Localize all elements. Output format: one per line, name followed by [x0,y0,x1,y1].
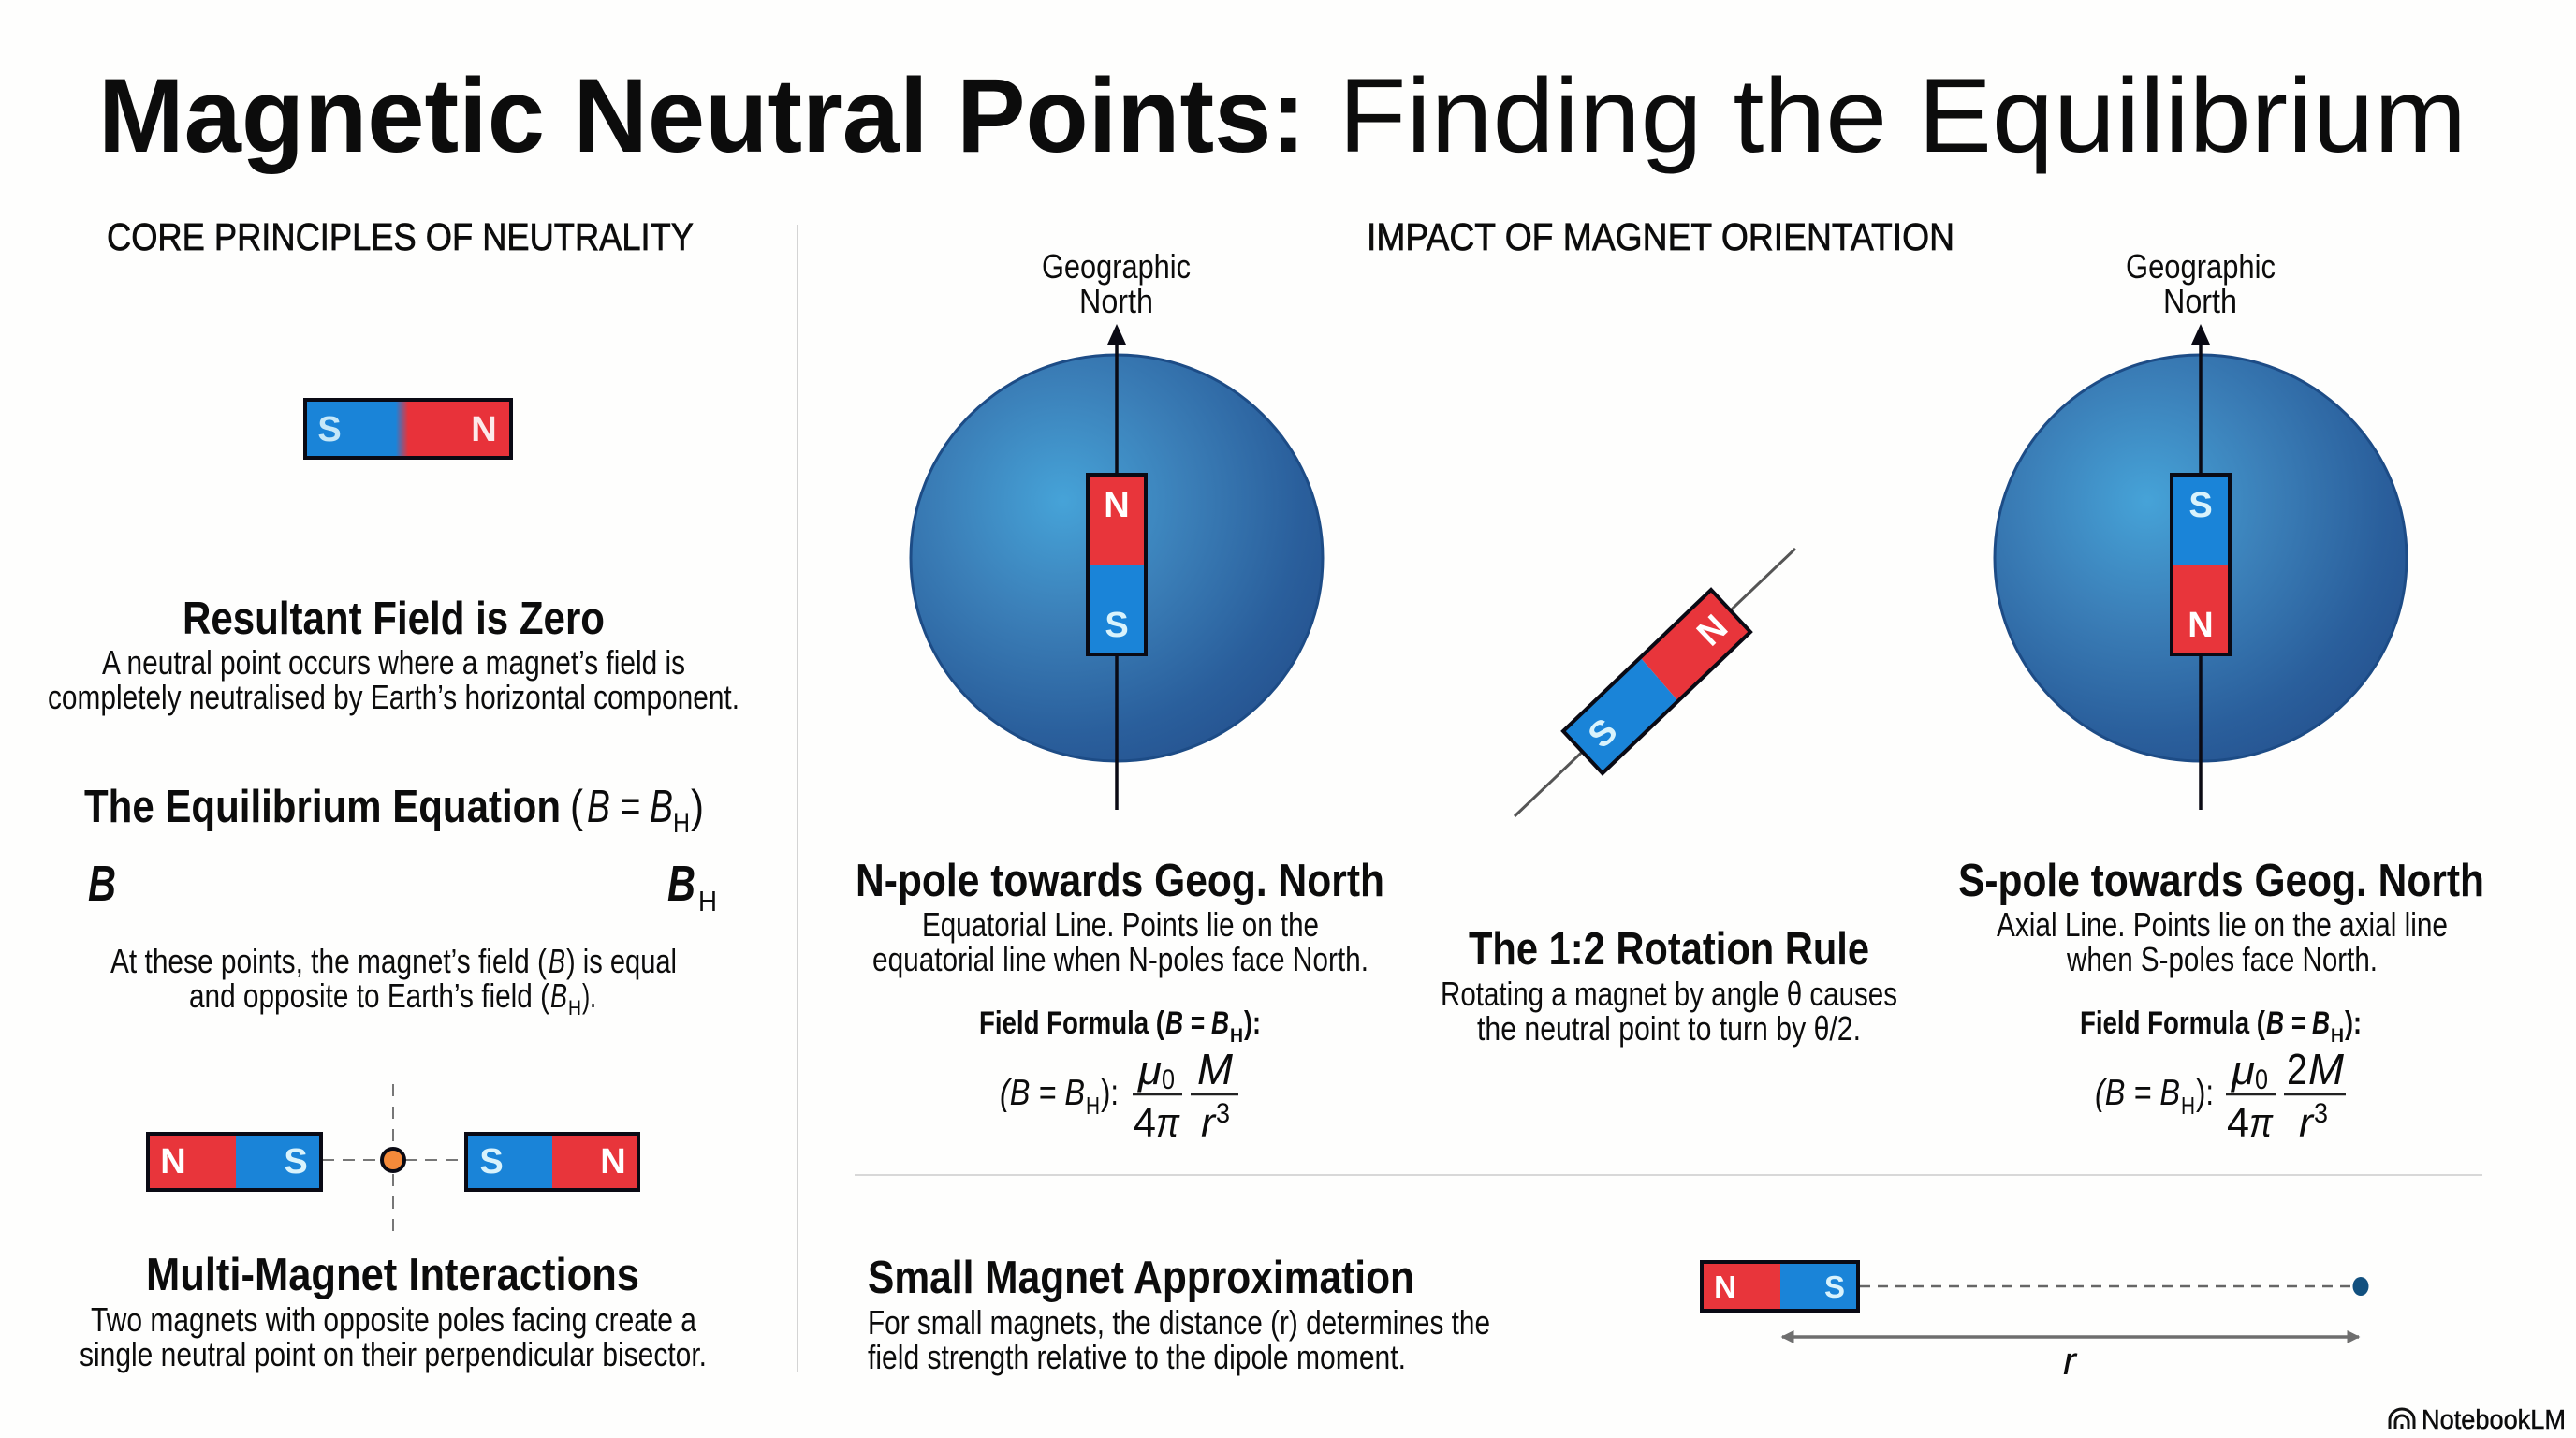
formula: mu0/4pi M/r3: 0 [1162,1064,1175,1095]
text block: rotation rule: The 1:2 Rotation Rule [1469,924,1869,975]
sub-panel: small magnet approximation [868,1253,2368,1383]
formula: mu0/4pi M/r3: ): [1101,1073,1119,1113]
formula: mu0/4pi M/r3: r [1201,1100,1217,1146]
diagram: distance r [1702,1262,2368,1383]
label: B_H [667,856,717,917]
magnet: N-S left: S [284,1142,308,1181]
arrow: distance r [1782,1335,2359,1339]
label: geographic north: North [2163,282,2237,320]
diagram: globe with S-up magnet: N [2188,606,2214,645]
neutral point [382,1149,404,1171]
label: geographic north [1042,247,1191,320]
sub-panel: S-pole towards geographic north [1958,247,2484,1146]
formula: mu0/4pi 2M/r3: ): [2196,1073,2214,1113]
panel: core principles of neutrality [48,215,739,1373]
formula: mu0/4pi 2M/r3: H [2181,1092,2195,1120]
text block: multi-magnet interactions: single neutral point on their perpendicular bisector. [80,1335,707,1373]
formula: mu0/4pi M/r3: 4 [1134,1100,1156,1146]
label: geographic north: Geographic [1042,247,1191,286]
text block: small magnet approximation [868,1253,1490,1376]
sub-panel: 1:2 rotation rule [1441,549,1897,1048]
diagram: globe with N-up magnet [911,324,1323,810]
title [98,57,2466,174]
text block: N-pole heading and description [856,856,1384,978]
text block: N-pole heading and description: equatorial line when N-poles face North. [872,940,1368,978]
text block: resultant field is zero: Resultant Field is Zero [183,594,605,644]
text block: multi-magnet interactions: Two magnets with opposite poles facing create a [91,1300,697,1339]
panel: impact of magnet orientation [855,215,2484,1383]
diagram: two magnets with neutral point [148,1084,638,1236]
label: B_H: B [667,856,695,912]
formula: mu0/4pi 2M/r3: μ [2231,1048,2255,1093]
label: field formula: Field Formula ( [2080,1005,2266,1041]
text block: equilibrium explanation: At these points, the magnet’s field ( [110,942,547,980]
text block: small magnet approximation: For small magnets, the distance (r) determines the [868,1303,1490,1342]
label: geographic north [2126,247,2276,320]
formula: mu0/4pi 2M/r3: 0 [2255,1064,2268,1095]
label: field formula [2080,1005,2362,1047]
magnet: N-S left: N [160,1142,186,1181]
text block: rotation rule: Rotating a magnet by angle θ causes [1441,975,1897,1013]
label: field formula: H [2331,1025,2344,1047]
text block: equilibrium explanation: ). [582,976,596,1015]
text block: multi-magnet interactions [80,1250,707,1373]
icon: bar magnet S-N [305,400,511,458]
diagram: globe with N-up magnet: S [1105,606,1129,645]
watermark: NotebookLM: NotebookLM [2422,1405,2566,1435]
icon: bar magnet S-N: S [317,410,342,449]
title: Magnetic Neutral Points: [98,57,1306,174]
heading: the equilibrium equation: B = B [587,782,673,832]
diagram: globe with S-up magnet [1995,324,2407,810]
formula: mu0/4pi M/r3: M [1197,1045,1234,1093]
heading: the equilibrium equation: ) [691,782,704,832]
text block: equilibrium explanation: and opposite to Earth’s field ( [189,976,549,1015]
formula: mu0/4pi 2M/r3: 4 [2227,1100,2249,1146]
label: geographic north: Geographic [2126,247,2276,286]
text block: resultant field is zero: A neutral point occurs where a magnet’s field is [102,643,685,682]
text block: small magnet approximation: field strength relative to the dipole moment. [868,1338,1406,1376]
magnet: N-S small: N [1714,1269,1736,1304]
label: geographic north: North [1079,282,1153,320]
icon: bar magnet S-N: N [471,410,497,449]
magnet: S-N right: N [600,1142,626,1181]
heading: core principles: CORE PRINCIPLES OF NEUTRALITY [107,215,694,258]
title: Finding the Equilibrium [1339,57,2466,174]
diagram: rotated magnet: S [1581,712,1625,756]
magnet: N-S small [1702,1262,1858,1311]
heading: the equilibrium equation: The Equilibrium Equation [84,782,561,832]
formula: mu0/4pi 2M/r3: r [2299,1100,2315,1146]
magnet: N-S left [148,1134,321,1190]
diagram: rotated magnet: N [1690,608,1735,653]
magnet: S-N right: S [479,1142,504,1181]
label: field formula: H [1230,1025,1243,1047]
diagram: globe with N-up magnet: N [1104,486,1130,525]
formula: mu0/4pi 2M/r3: 2 [2287,1045,2307,1093]
label: field formula [979,1005,1261,1047]
heading: the equilibrium equation: H [673,808,690,839]
point [2353,1277,2368,1296]
formula: mu0/4pi M/r3: (B = B [1000,1073,1085,1113]
text block: S-pole heading and description: S-pole towards Geog. North [1958,856,2484,906]
text block: equilibrium explanation [110,942,677,1020]
text block: small magnet approximation: Small Magnet Approximation [868,1253,1414,1303]
formula: mu0/4pi 2M/r3: 3 [2314,1098,2328,1129]
formula: mu0/4pi M/r3: 3 [1216,1098,1230,1129]
text block: resultant field is zero: completely neutralised by Earth’s horizontal component. [48,678,739,716]
text block: rotation rule [1441,924,1897,1048]
diagram: rotated magnet [1515,549,1795,816]
magnet: N-S small: S [1824,1269,1845,1304]
label: B: B [88,856,116,912]
magnet: S-N right [466,1134,638,1190]
text block: equilibrium explanation: B [550,976,567,1015]
text block: S-pole heading and description: Axial Line. Points lie on the axial line [1997,905,2448,944]
text block: rotation rule: the neutral point to turn by θ/2. [1477,1009,1861,1048]
heading: impact of magnet orientation: IMPACT OF MAGNET ORIENTATION [1367,215,1954,258]
text block: equilibrium explanation: H [568,996,581,1020]
label: field formula: Field Formula ( [979,1005,1165,1041]
formula: mu0/4pi M/r3 [1000,1045,1238,1146]
label: field formula: B = B [2266,1005,2330,1041]
formula: mu0/4pi 2M/r3: (B = B [2095,1073,2180,1113]
formula: mu0/4pi 2M/r3 [2095,1045,2346,1146]
text block: resultant field is zero [48,594,739,716]
heading: the equilibrium equation: ( [570,782,584,832]
formula: mu0/4pi 2M/r3: π [2249,1100,2274,1146]
text block: S-pole heading and description [1958,856,2484,978]
label: B_H: H [698,885,717,917]
text block: N-pole heading and description: Equatorial Line. Points lie on the [922,905,1319,944]
label: field formula: ): [2345,1005,2362,1041]
text block: multi-magnet interactions: Multi-Magnet Interactions [146,1250,639,1300]
label: field formula: ): [1244,1005,1261,1041]
sub-panel: N-pole towards geographic north [856,247,1384,1146]
formula: mu0/4pi 2M/r3: M [2308,1045,2345,1093]
label: field formula: B = B [1165,1005,1229,1041]
text block: N-pole heading and description: N-pole towards Geog. North [856,856,1384,906]
text block: equilibrium explanation: B [549,942,565,980]
text block: equilibrium explanation: ) is equal [566,942,677,980]
diagram: globe with S-up magnet: S [2188,486,2213,525]
label: r: r [2063,1339,2078,1383]
formula: mu0/4pi M/r3: μ [1137,1048,1162,1093]
formula: mu0/4pi M/r3: H [1086,1092,1100,1120]
text block: S-pole heading and description: when S-poles face North. [2066,940,2378,978]
formula: mu0/4pi M/r3: π [1156,1100,1180,1146]
